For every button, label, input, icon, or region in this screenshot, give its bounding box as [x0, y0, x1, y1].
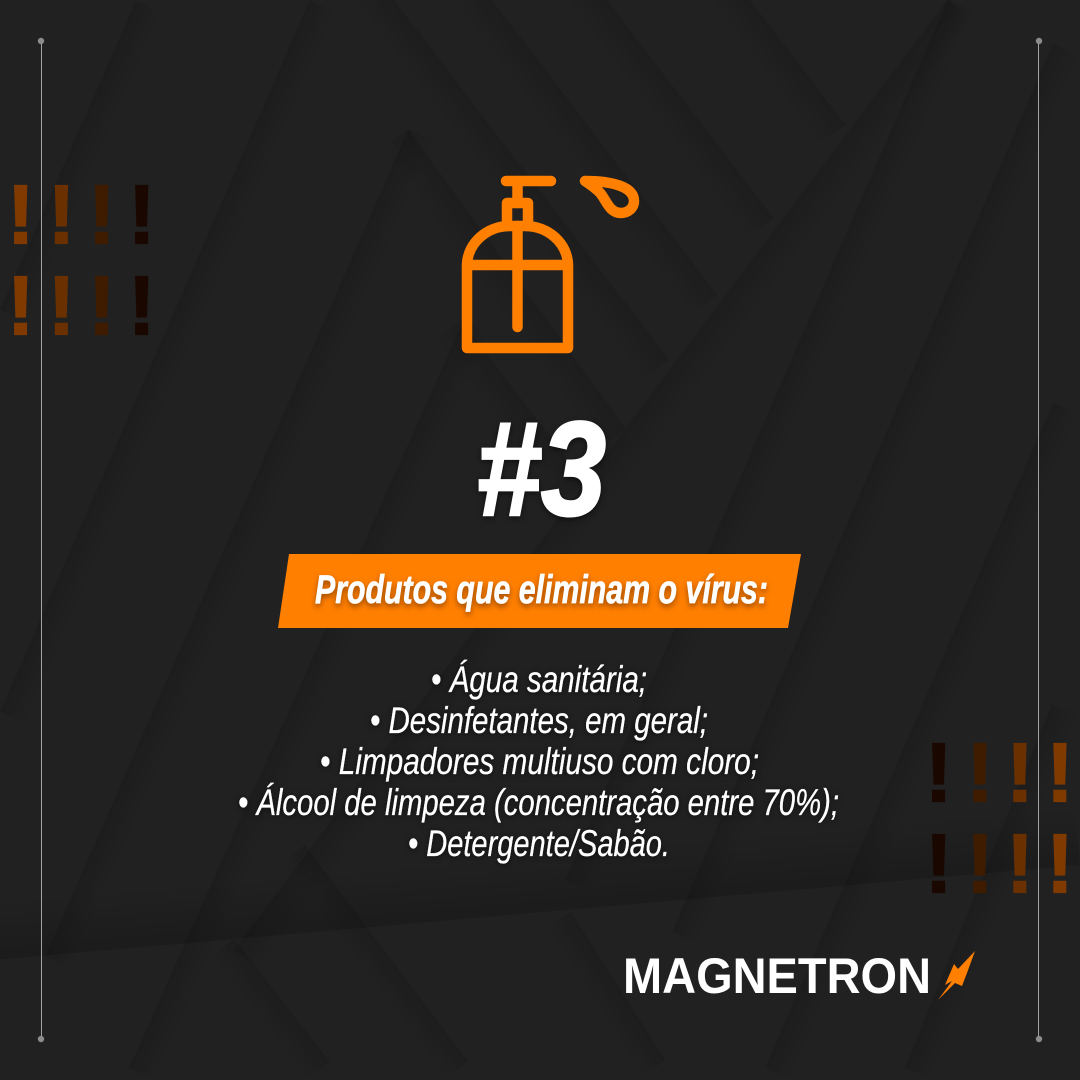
- product list: • Desinfetantes, em geral;: [370, 700, 708, 741]
- right vertical rule with end dots: [1036, 38, 1042, 1042]
- exclamation marks: top left group: !: [48, 258, 75, 352]
- exclamation marks: top left group: !: [7, 258, 35, 352]
- logo: Magnetron wordmark with lightning bolt: MAGNETRON: [623, 948, 931, 1004]
- exclamation marks: lower right group: !: [966, 726, 994, 820]
- icon: soap dispenser bottle with droplet: [467, 181, 634, 348]
- exclamation marks: top left group: !: [7, 168, 35, 262]
- product list: • Limpadores multiuso com cloro;: [320, 741, 759, 782]
- product list: • Detergente/Sabão.: [408, 823, 670, 864]
- exclamation marks: top left group: !: [88, 168, 116, 262]
- orange banner with heading: [278, 554, 801, 628]
- product list: • Álcool de limpeza (concentração entre 70%);: [238, 782, 839, 823]
- exclamation marks: top left group: [7, 168, 156, 352]
- exclamation marks: top left group: !: [88, 258, 116, 352]
- product list: • Água sanitária;: [431, 659, 647, 700]
- exclamation marks: lower right group: !: [1006, 816, 1034, 910]
- exclamation marks: top left group: !: [128, 258, 156, 352]
- exclamation marks: lower right group: !: [925, 816, 953, 910]
- exclamation marks: lower right group: !: [925, 726, 953, 820]
- exclamation marks: lower right group: !: [1006, 726, 1034, 820]
- exclamation marks: lower right group: !: [1046, 726, 1074, 820]
- exclamation marks: lower right group: !: [1046, 816, 1074, 910]
- left vertical rule with end dots: [38, 38, 44, 1042]
- exclamation marks: lower right group: [925, 726, 1074, 910]
- exclamation marks: lower right group: !: [966, 816, 994, 910]
- exclamation marks: top left group: !: [128, 168, 156, 262]
- orange banner with heading: Produtos que eliminam o vírus:: [315, 568, 768, 612]
- exclamation marks: top left group: !: [48, 168, 75, 262]
- number heading: #3: [476, 395, 606, 544]
- product list: [238, 659, 839, 864]
- background: dark panel with chevron shadows: [46, 868, 992, 955]
